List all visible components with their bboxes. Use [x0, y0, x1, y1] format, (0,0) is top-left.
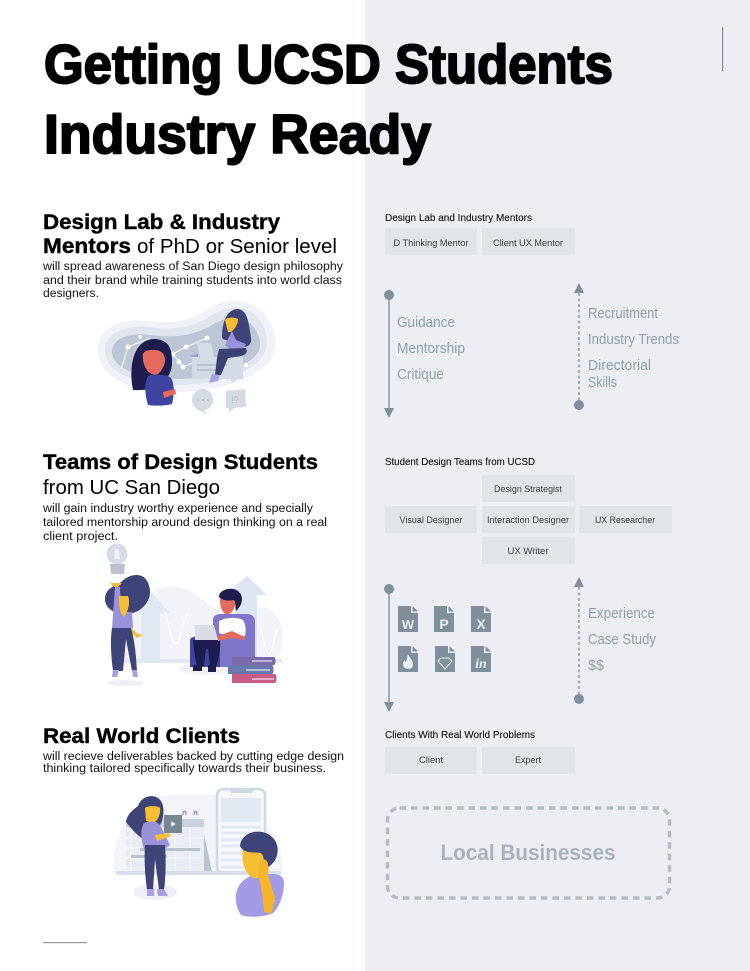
- section text: design lab: will spread awareness of San Diego design philosophy: [42, 261, 343, 273]
- section text: teams: tailored mentorship around design thinking on a real: [43, 517, 327, 529]
- guidance labels: Guidance: [397, 315, 455, 331]
- illustration: students: [105, 544, 283, 686]
- callout: local businesses: [388, 808, 670, 898]
- icon: excel file: X: [476, 616, 486, 632]
- section text: teams: [42, 450, 327, 543]
- group: student design teams: Interaction Designer: [487, 515, 569, 525]
- recruitment labels: Skills: [588, 375, 617, 391]
- section text: design lab: Design Lab & Industry: [43, 210, 280, 234]
- group: student design teams: Visual Designer: [400, 515, 462, 525]
- section text: teams: Teams of Design Students: [43, 450, 318, 474]
- experience labels: Case Study: [588, 632, 657, 648]
- callout: local businesses: Local Businesses: [440, 840, 616, 865]
- section text: clients: will recieve deliverables backed by cutting edge design: [42, 751, 344, 763]
- icon: invision file: in: [475, 657, 487, 672]
- experience labels: Experience: [588, 606, 655, 622]
- guidance labels: Mentorship: [397, 341, 465, 357]
- group: design lab mentors: Client UX Mentor: [493, 238, 563, 248]
- section text: design lab: of PhD or Senior level: [137, 236, 337, 258]
- icon: word file: W: [402, 617, 415, 632]
- section text: teams: will gain industry worthy experience and specially: [42, 503, 313, 515]
- guidance labels: [397, 315, 465, 383]
- icon: flame file: [398, 646, 418, 672]
- group: clients: Clients With Real World Problems: [385, 729, 535, 741]
- icon: powerpoint file: P: [439, 616, 449, 632]
- section text: clients: thinking tailored specifically towards their business.: [43, 763, 326, 775]
- section text: design lab: and their brand while training students into world class: [43, 275, 342, 287]
- group: clients: Expert: [515, 755, 541, 765]
- section text: clients: Real World Clients: [43, 724, 240, 748]
- file icons: [398, 606, 491, 672]
- group: student design teams: UX Researcher: [595, 515, 655, 525]
- group: design lab mentors: D Thinking Mentor: [394, 238, 468, 248]
- icon: sketch file: [435, 646, 455, 672]
- group: clients: Client: [419, 755, 444, 765]
- section text: design lab: designers.: [43, 288, 99, 300]
- group: student design teams: Student Design Teams from UCSD: [385, 456, 535, 468]
- title: [44, 33, 613, 165]
- section text: design lab: [42, 210, 343, 300]
- group: design lab mentors: Design Lab and Industry Mentors: [385, 212, 532, 224]
- arrow: recruitment up: [574, 283, 584, 410]
- group: student design teams: Design Strategist: [494, 484, 562, 494]
- arrow: deliverables down: [384, 584, 394, 712]
- experience labels: [588, 606, 657, 674]
- group: clients: [385, 729, 575, 774]
- top right tick: [722, 27, 723, 71]
- experience labels: $$: [588, 658, 604, 674]
- title: Getting UCSD Students: [44, 33, 613, 95]
- bottom left rule: [43, 942, 87, 943]
- guidance labels: Critique: [397, 367, 444, 383]
- arrow: guidance down: [384, 290, 394, 418]
- recruitment labels: Recruitment: [588, 306, 658, 322]
- section text: design lab: Mentors: [43, 234, 131, 258]
- group: student design teams: [385, 456, 672, 564]
- group: student design teams: UX Writer: [508, 546, 548, 556]
- section text: teams: from UC San Diego: [43, 477, 220, 499]
- group: design lab mentors: [385, 212, 575, 255]
- illustration: mentors: !?: [231, 395, 239, 405]
- recruitment labels: Industry Trends: [588, 332, 679, 348]
- title: Industry Ready: [44, 103, 431, 165]
- illustration: clients: [113, 789, 284, 917]
- illustration: mentors: [98, 301, 276, 414]
- recruitment labels: Directorial: [588, 358, 651, 374]
- section text: clients: [42, 724, 344, 775]
- section text: teams: client project.: [43, 531, 118, 543]
- panel: right background: [365, 0, 750, 971]
- arrow: experience up: [574, 577, 584, 704]
- recruitment labels: [588, 306, 679, 391]
